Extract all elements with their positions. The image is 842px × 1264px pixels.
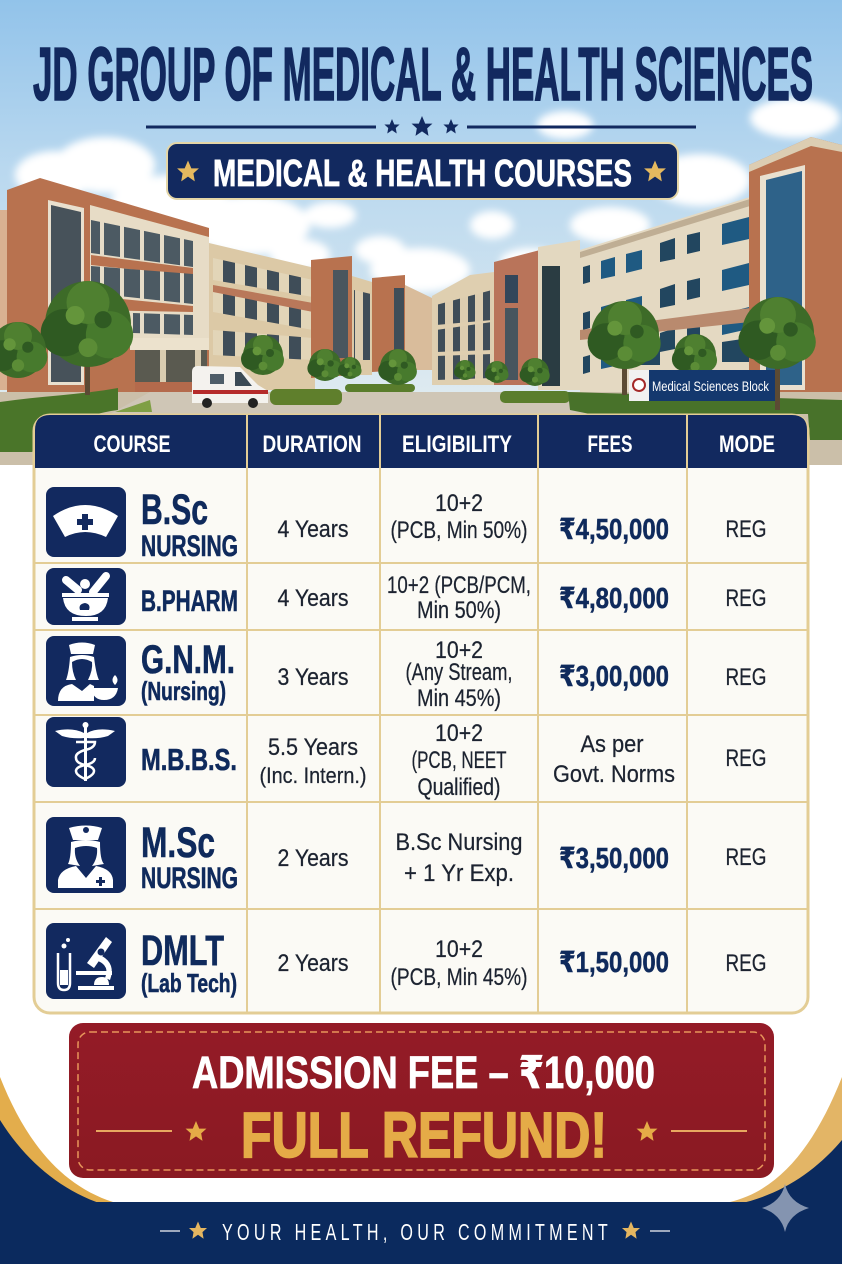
row: M.Sc Nursing: B.Sc Nursing bbox=[396, 829, 522, 856]
row: G.N.M.: G.N.M. bbox=[141, 638, 235, 682]
row: M.Sc Nursing: + 1 Yr Exp. bbox=[404, 860, 514, 887]
subtitle banner: MEDICAL & HEALTH COURSES bbox=[213, 153, 632, 195]
row: DMLT: (Lab Tech) bbox=[141, 968, 237, 998]
table header: COURSE bbox=[94, 431, 170, 458]
right tower bbox=[749, 137, 842, 395]
clouds bbox=[15, 98, 840, 292]
row: DMLT: DMLT bbox=[141, 927, 224, 975]
row: M.Sc Nursing: M.Sc bbox=[141, 819, 215, 867]
row: M.Sc Nursing: ₹3,50,000 bbox=[559, 843, 669, 875]
white lower background bbox=[0, 465, 842, 1264]
ambulance bbox=[192, 366, 268, 408]
admission fee banner: ADMISSION FEE – ₹10,000 bbox=[192, 1047, 655, 1098]
row: G.N.M.: 3 Years bbox=[278, 664, 348, 691]
table header: DURATION bbox=[262, 431, 362, 458]
icon: microscope and test tube bbox=[46, 923, 126, 999]
row: B.Pharm: ₹4,80,000 bbox=[559, 583, 669, 615]
row: DMLT: ₹1,50,000 bbox=[559, 947, 669, 979]
row: B.Pharm: 4 Years bbox=[278, 585, 348, 612]
row: M.B.B.S.: (PCB, NEET bbox=[412, 747, 507, 774]
row: G.N.M.: 10+2 bbox=[435, 637, 483, 664]
row: B.Pharm: B.PHARM bbox=[141, 585, 238, 618]
row: G.N.M. bbox=[46, 636, 766, 712]
icon: sparkle watermark bbox=[762, 1184, 809, 1232]
icon: nurse with lamp bbox=[46, 636, 126, 706]
row: B.Sc Nursing bbox=[46, 486, 766, 563]
row: B.Pharm bbox=[46, 568, 766, 625]
background: sky bbox=[0, 0, 842, 420]
subtitle banner bbox=[167, 143, 678, 199]
row: DMLT: (PCB, Min 45%) bbox=[390, 964, 528, 991]
sign: medical sciences block bbox=[629, 370, 775, 401]
row: M.Sc Nursing: NURSING bbox=[141, 862, 238, 895]
divider with stars bbox=[146, 116, 696, 136]
row: B.Sc Nursing: ₹4,50,000 bbox=[559, 514, 669, 546]
row: G.N.M.: Min 45%) bbox=[417, 685, 501, 712]
footer tagline: YOUR HEALTH, OUR COMMITMENT bbox=[222, 1220, 608, 1246]
admission fee banner: FULL REFUND! bbox=[241, 1099, 607, 1171]
row: B.Pharm: Min 50%) bbox=[417, 597, 501, 624]
row: M.Sc Nursing bbox=[46, 817, 766, 895]
row: G.N.M.: (Any Stream, bbox=[406, 659, 512, 686]
table header: MODE bbox=[719, 431, 775, 458]
row: DMLT bbox=[46, 923, 766, 999]
left building bbox=[0, 178, 220, 394]
row: M.B.B.S.: (Inc. Intern.) bbox=[260, 763, 366, 788]
trees bbox=[0, 281, 816, 410]
row: M.B.B.S.: REG bbox=[726, 745, 766, 772]
row: B.Sc Nursing: REG bbox=[726, 516, 766, 543]
row: B.Pharm: REG bbox=[726, 585, 766, 612]
row: G.N.M.: ₹3,00,000 bbox=[559, 661, 669, 693]
table header bbox=[35, 415, 807, 468]
ground bbox=[0, 392, 842, 468]
row: G.N.M.: (Nursing) bbox=[141, 676, 226, 706]
row: G.N.M.: REG bbox=[726, 664, 766, 691]
row: B.Sc Nursing: 10+2 bbox=[435, 490, 483, 517]
row: M.B.B.S.: M.B.B.S. bbox=[141, 742, 237, 777]
row: M.B.B.S.: 10+2 bbox=[435, 720, 483, 747]
row: M.B.B.S.: As per bbox=[580, 731, 644, 758]
icon: nurse bbox=[46, 817, 126, 893]
right wing long bbox=[580, 197, 750, 392]
centre-left wing bbox=[209, 243, 432, 390]
course table bbox=[34, 415, 808, 1013]
row: B.Sc Nursing: B.Sc bbox=[141, 486, 208, 534]
row: B.Sc Nursing: NURSING bbox=[141, 530, 238, 563]
row: DMLT: 10+2 bbox=[435, 936, 483, 963]
table header: ELIGIBILITY bbox=[402, 431, 512, 458]
row: M.Sc Nursing: REG bbox=[726, 844, 766, 871]
sign: medical sciences block: Medical Sciences Block bbox=[652, 378, 770, 394]
hedges bbox=[0, 384, 842, 452]
row: M.B.B.S.: Qualified) bbox=[418, 774, 500, 801]
icon: nurse cap bbox=[46, 487, 126, 557]
row: M.B.B.S. bbox=[46, 717, 766, 801]
right wing low bbox=[432, 240, 580, 390]
row: M.B.B.S.: Govt. Norms bbox=[553, 761, 675, 788]
row: DMLT: 2 Years bbox=[278, 950, 348, 977]
icon: mortar and pestle bbox=[46, 568, 126, 625]
bottom curved footer background bbox=[0, 1077, 842, 1264]
table grid bbox=[34, 415, 808, 1013]
admission fee banner bbox=[69, 1023, 774, 1178]
table header: FEES bbox=[588, 431, 632, 458]
row: M.B.B.S.: 5.5 Years bbox=[268, 734, 358, 761]
icon: caduceus bbox=[46, 717, 126, 787]
row: B.Sc Nursing: (PCB, Min 50%) bbox=[390, 517, 528, 544]
campus illustration bbox=[0, 137, 842, 468]
row: DMLT: REG bbox=[726, 950, 766, 977]
row: B.Sc Nursing: 4 Years bbox=[278, 516, 348, 543]
row: B.Pharm: 10+2 (PCB/PCM, bbox=[387, 572, 531, 599]
row: M.Sc Nursing: 2 Years bbox=[278, 845, 348, 872]
